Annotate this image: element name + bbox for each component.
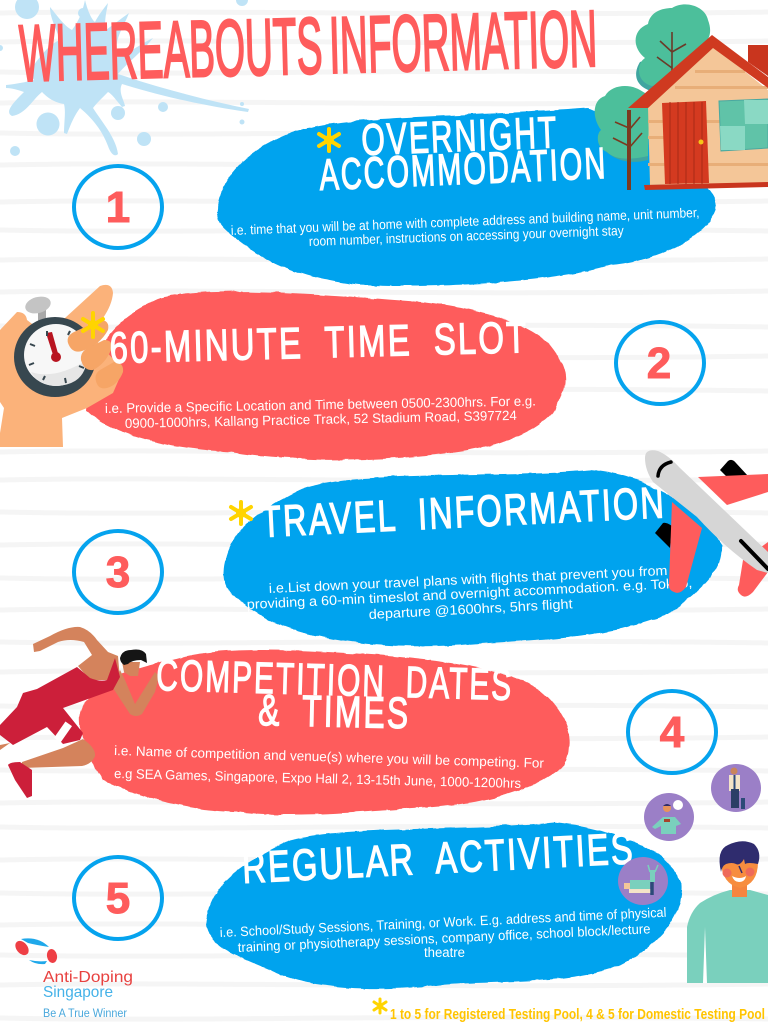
icon: trees and house	[595, 4, 768, 190]
body text	[246, 563, 693, 622]
footnote	[374, 999, 765, 1023]
heading	[318, 108, 608, 200]
logo text: Anti-Doping	[43, 969, 133, 986]
body text: i.e. Name of competition and venue(s) where you will be competing. For	[114, 743, 545, 771]
icon: purple circle traveller	[711, 764, 761, 812]
panel: 60-minute time slot	[0, 285, 566, 460]
heading: & TIMES	[258, 686, 411, 738]
body text	[105, 393, 536, 431]
heading	[156, 651, 514, 738]
body text: i.e. School/Study Sessions, Training, or Work. E.g. address and time of physical	[219, 905, 667, 940]
number badge 2	[616, 322, 704, 404]
icon: sprinter	[0, 627, 159, 798]
panel: regular activities	[206, 822, 682, 989]
body text: 0900-1000hrs, Kallang Practice Track, 52 Stadium Road, S397724	[125, 408, 517, 431]
logo: Anti-Doping Singapore	[13, 938, 133, 1020]
icon: smiling person	[687, 841, 768, 983]
icon: purple circle man with coffee	[644, 793, 694, 841]
heading: COMPETITION DATES	[156, 651, 514, 710]
body text: i.e. time that you will be at home with complete address and building name, unit number,	[231, 205, 700, 238]
heading: OVERNIGHT	[360, 108, 559, 165]
icon: yellow asterisk	[83, 313, 103, 337]
number badge 5: 5	[106, 874, 130, 923]
icon: purple circle bedroom	[618, 857, 668, 905]
number badge 5	[74, 857, 162, 939]
number badge 3	[74, 531, 162, 613]
body text	[231, 205, 700, 249]
body text: training or physiotherapy sessions, company office, school block/lecture	[237, 921, 651, 955]
logo: Anti-Doping Singapore: Be A True Winner	[43, 1008, 127, 1020]
splash decoration	[0, 0, 249, 156]
blue blob	[224, 470, 722, 646]
coral blob	[86, 292, 566, 460]
panel: travel information	[224, 450, 768, 646]
panel: competition dates and times	[0, 627, 570, 815]
icon: yellow asterisk	[231, 502, 251, 524]
logo: Anti-Doping Singapore: Singapore	[43, 984, 113, 1001]
logo mark	[13, 938, 58, 964]
number badge 2: 2	[647, 339, 671, 388]
body text: i.e. Provide a Specific Location and Time between 0500-2300hrs. For e.g.	[105, 393, 536, 416]
heading: REGULAR ACTIVITIES	[241, 824, 636, 893]
coral blob	[80, 650, 570, 815]
heading: 60-MINUTE TIME SLOT	[109, 313, 529, 373]
number badge 3: 3	[106, 548, 130, 597]
number badge 1: 1	[106, 183, 130, 232]
body text: e.g SEA Games, Singapore, Expo Hall 2, 13-15th June, 1000-1200hrs	[114, 766, 521, 791]
number badge 1	[74, 166, 162, 248]
panel: overnight accommodation	[217, 4, 768, 286]
number badge 4: 4	[660, 708, 685, 757]
body text	[114, 743, 545, 791]
number badge 4	[628, 691, 716, 773]
body text: i.e.List down your travel plans with flights that prevent you from	[268, 563, 668, 596]
body text: theatre	[424, 945, 465, 960]
blue blob	[217, 108, 716, 286]
icon: hand holding stopwatch	[0, 285, 123, 447]
icon: yellow asterisk	[374, 999, 386, 1013]
body text: room number, instructions on accessing your overnight stay	[309, 223, 624, 249]
icon: airplane	[645, 450, 768, 597]
blue blob	[206, 822, 682, 989]
body text: departure @1600hrs, 5hrs flight	[368, 596, 573, 622]
heading: ACCOMMODATION	[318, 139, 608, 200]
body text: providing a 60-min timeslot and overnight accommodation. e.g. Tokyo,	[246, 575, 693, 612]
icon: yellow asterisk	[319, 129, 339, 151]
body text	[219, 905, 667, 960]
